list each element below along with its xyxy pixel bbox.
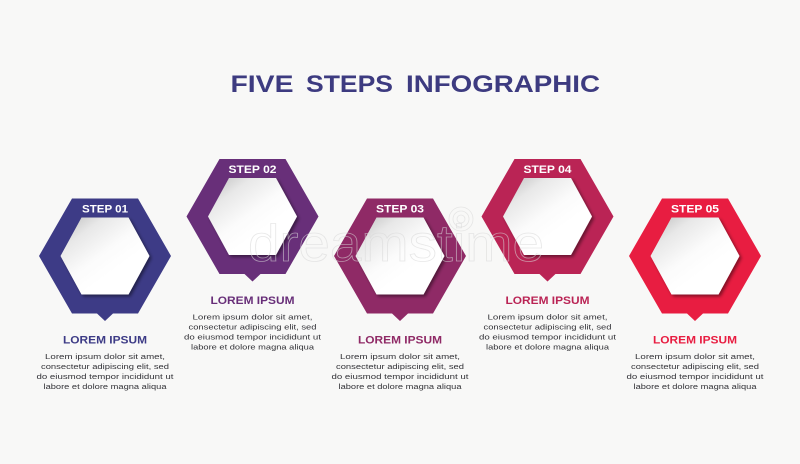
step 03 description: labore et dolore magna aliqua — [338, 382, 462, 391]
step 04 inner white hexagon — [503, 178, 592, 255]
step 04 description: do eiusmod tempor incididunt ut — [479, 332, 617, 342]
step 01 inner white hexagon — [60, 218, 150, 294]
step 05 — [626, 198, 765, 391]
step 05 heading: LOREM IPSUM — [653, 334, 737, 346]
watermark: dreamstime — [248, 215, 544, 273]
step 03 hexagon — [334, 198, 466, 321]
step 01 description: consectetur adipiscing elit, sed — [41, 362, 169, 371]
step 02 description — [184, 312, 322, 352]
step 05 description: do eiusmod tempor incididunt ut — [626, 372, 765, 381]
title: INFOGRAPHIC — [406, 71, 600, 98]
step 01 description: Lorem ipsum dolor sit amet, — [45, 352, 165, 361]
step 03 description: Lorem ipsum dolor sit amet, — [340, 352, 460, 361]
step 03 inner white hexagon — [356, 218, 444, 294]
step 02 description: labore et dolore magna aliqua — [191, 342, 315, 352]
step 03 description: consectetur adipiscing elit, sed — [336, 362, 464, 371]
step 04 description: consectetur adipiscing elit, sed — [484, 322, 612, 332]
step 01 label: STEP 01 — [82, 204, 128, 216]
step 01 description: labore et dolore magna aliqua — [44, 382, 167, 391]
step 05 description: consectetur adipiscing elit, sed — [631, 362, 759, 371]
step 05 label: STEP 05 — [671, 204, 719, 216]
step 01 hexagon — [39, 198, 171, 321]
step 01 description — [36, 352, 175, 391]
step 04 description — [479, 312, 617, 352]
step 01 description: do eiusmod tempor incididunt ut — [36, 372, 175, 381]
title: STEPS — [306, 71, 393, 98]
step 01 — [36, 198, 175, 391]
step 03 description: do eiusmod tempor incididunt ut — [332, 372, 470, 381]
step 04 — [479, 159, 617, 352]
step 02 description: do eiusmod tempor incididunt ut — [184, 332, 322, 342]
step 02 label: STEP 02 — [228, 164, 277, 176]
step 02 inner white hexagon — [208, 178, 297, 255]
step 03 description — [332, 352, 470, 391]
step 02 description: consectetur adipiscing elit, sed — [188, 322, 316, 332]
step 04 label: STEP 04 — [524, 164, 572, 176]
step 03 — [332, 198, 470, 391]
title — [230, 71, 600, 98]
step 04 hexagon — [482, 159, 614, 282]
step 04 description: labore et dolore magna aliqua — [486, 342, 610, 352]
step 03 heading: LOREM IPSUM — [358, 334, 442, 346]
step 02 heading: LOREM IPSUM — [210, 295, 294, 307]
step 03 label: STEP 03 — [376, 204, 424, 216]
step 02 — [184, 159, 322, 352]
step 05 inner white hexagon — [650, 218, 740, 294]
step 05 description — [626, 352, 765, 391]
step 02 hexagon — [186, 159, 318, 282]
step 02 description: Lorem ipsum dolor sit amet, — [192, 312, 312, 322]
step 05 description: labore et dolore magna aliqua — [634, 382, 757, 391]
step 04 description: Lorem ipsum dolor sit amet, — [488, 312, 608, 322]
step 05 hexagon — [629, 198, 761, 321]
step 01 heading: LOREM IPSUM — [63, 334, 147, 346]
step 05 description: Lorem ipsum dolor sit amet, — [635, 352, 755, 361]
title: FIVE — [230, 71, 294, 98]
step 04 heading: LOREM IPSUM — [506, 295, 590, 307]
